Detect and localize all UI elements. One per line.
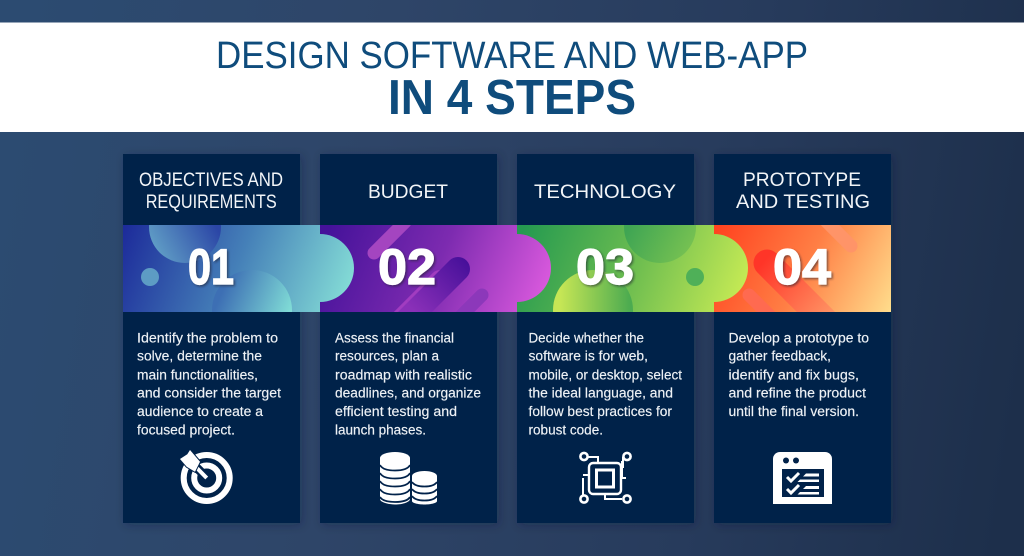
panel: step 2 budget	[320, 154, 551, 523]
number 03: 03	[576, 239, 634, 295]
panel: step 1 objectives and requirements	[123, 154, 354, 523]
description: step 4: identify and fix bugs,	[728, 367, 859, 382]
description: step 4: until the final version.	[728, 404, 859, 419]
description: step 3: robust code.	[528, 422, 603, 437]
title line 2: IN 4 STEPS	[388, 71, 636, 125]
description: step 1: Identify the problem to	[137, 330, 278, 345]
panel: step 3 technology	[517, 154, 748, 523]
heading: prototype and testing	[736, 169, 870, 213]
icon: checklist window	[773, 452, 832, 504]
band: step 3 colour band	[517, 225, 748, 312]
heading: budget: BUDGET	[368, 181, 448, 203]
description: step 1: focused project.	[137, 422, 235, 437]
icon: target with arrow	[180, 450, 230, 501]
icon: circuit chip	[580, 453, 631, 503]
description: step 3: Decide whether the	[528, 330, 644, 345]
heading: technology: TECHNOLOGY	[534, 181, 676, 203]
description: step 2: roadmap with realistic	[335, 367, 472, 382]
description: step 1: audience to create a	[137, 404, 263, 419]
description: step 2: deadlines, and organize	[335, 386, 481, 401]
number 01: 01	[188, 239, 234, 295]
band: step 4 colour band	[714, 225, 891, 312]
description: step 4	[728, 330, 869, 419]
band: step 1 colour band	[123, 225, 354, 312]
description: step 3	[528, 330, 682, 437]
description: step 3: the ideal language, and	[528, 386, 673, 401]
description: step 4: gather feedback,	[728, 349, 831, 364]
number 04: 04	[773, 239, 831, 295]
description: step 4: Develop a prototype to	[728, 330, 869, 345]
heading: objectives and requirements: REQUIREMENTS	[146, 191, 277, 213]
description: step 2: Assess the financial	[335, 330, 454, 345]
description: step 2: resources, plan a	[335, 349, 439, 364]
description: step 1	[137, 330, 281, 437]
description: step 2	[335, 330, 481, 437]
icon: coin stacks	[380, 452, 437, 504]
description: step 3: follow best practices for	[528, 404, 673, 419]
description: step 4: and refine the product	[728, 386, 866, 401]
description: step 1: solve, determine the	[137, 349, 262, 364]
description: step 3: mobile, or desktop, select	[528, 367, 682, 382]
title banner	[0, 22, 1024, 132]
heading: objectives and requirements	[139, 169, 283, 213]
heading: prototype and testing: PROTOTYPE	[743, 169, 861, 191]
number 02: 02	[378, 239, 436, 295]
panel: step 4 prototype and testing	[714, 154, 891, 523]
description: step 2: efficient testing and	[335, 404, 457, 419]
heading: prototype and testing: AND TESTING	[736, 191, 870, 213]
description: step 3: software is for web,	[528, 349, 648, 364]
description: step 1: main functionalities,	[137, 367, 258, 382]
heading: objectives and requirements: OBJECTIVES AND	[139, 169, 283, 191]
band: step 2 colour band	[320, 225, 551, 312]
description: step 1: and consider the target	[137, 386, 281, 401]
title line 1: DESIGN SOFTWARE AND WEB-APP	[216, 35, 808, 77]
description: step 2: launch phases.	[335, 422, 426, 437]
